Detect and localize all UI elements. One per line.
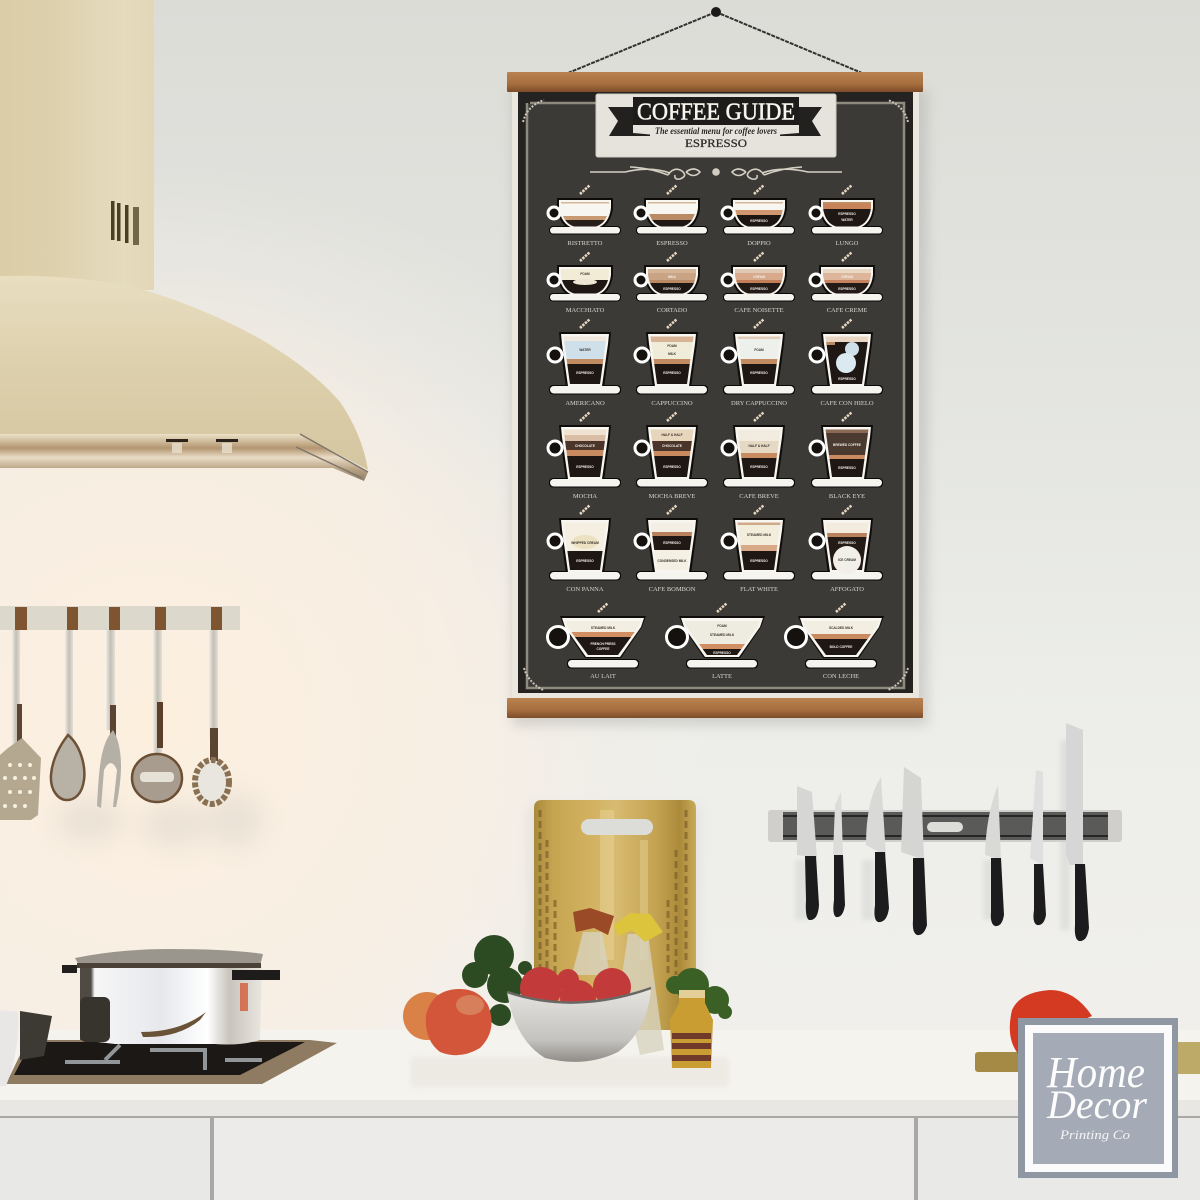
bar badge [927,822,963,832]
cup: americano [548,319,621,407]
cup: latte: STEAMED MILK [710,633,735,637]
cup: cortado: CORTADO [657,307,688,314]
round ladle [132,630,182,802]
cabinet door right [918,1118,1200,1200]
slotted spoon [195,630,229,804]
cup: cortado: MILK [668,275,677,279]
espresso heading: ESPRESSO [685,136,747,150]
cup: mocha breve: HALF & HALF [661,433,683,437]
subtitle: The essential menu for coffee lovers [655,126,777,136]
counter top surface [0,1030,1200,1102]
hood steel rim with lights [0,434,368,481]
cup: lungo: LUNGO [836,240,859,247]
cup: dry cappuccino: DRY CAPPUCCINO [731,400,787,407]
cup: black eye: BLACK EYE [829,493,865,500]
cup: ristretto: RISTRETTO [568,240,603,247]
hob [6,1040,337,1084]
magnetic bar [768,810,1122,842]
ribbon banner [633,97,799,125]
cup: lungo: WATER [841,218,853,222]
cup: con leche: CON LECHE [823,673,859,680]
cup: cappuccino: ESPRESSO [663,371,681,375]
cup: cafe bombon: ESPRESSO [663,541,681,545]
badge text decor: Decor [1046,1082,1147,1127]
cup: mocha: MOCHA [573,493,597,500]
knife 4 [901,767,927,935]
cup: con leche: SCALDED MILK [829,626,854,630]
cup: au lait: COFFEE [597,647,609,651]
cup: latte: FOAM [717,624,727,628]
cup: cafe breve: HALF & HALF [748,444,770,448]
cup: mocha: CHOCOLATE [575,444,595,448]
cup: cafe creme: CAFE CREME [827,307,867,314]
apple front [426,989,492,1055]
cup: cafe creme: ESPRESSO [838,287,856,291]
cup: lungo [810,185,883,247]
cup: con leche: BOLD COFFEE [830,645,852,649]
cup: flat white: STEAMED MILK [747,533,772,537]
cup: cafe noisette [722,252,795,314]
pot handle left [62,965,77,973]
cup: mocha [548,412,621,500]
cup: cafe con hielo: CAFE CON HIELO [820,400,874,407]
rack rail [0,606,240,630]
cup: con panna: WHIPPED CREAM [571,541,599,545]
poster shadow [512,90,928,726]
cabinet door left [0,1118,210,1200]
cup: flat white [722,505,795,593]
slotted spatula [0,630,41,820]
cup: lungo: ESPRESSO [838,212,856,216]
cup: cafe breve: CAFE BREVE [739,493,779,500]
utensil rack [0,606,263,848]
red pepper and platter [975,990,1200,1074]
counter reflection [410,1056,730,1088]
warm light under the hood [0,140,800,1100]
cup: cafe con hielo [810,319,883,407]
cup: black eye [810,412,883,500]
cup: flat white: FLAT WHITE [740,586,778,593]
wooden platter [975,1052,1025,1072]
cutting board [528,800,700,1046]
tomatoes [520,967,631,1016]
cup: black eye: BREWED COFFEE [833,443,861,447]
cup: americano: WATER [579,348,591,352]
cup: mocha breve: ESPRESSO [663,465,681,469]
knife rack [768,723,1122,941]
red pepper [1010,990,1092,1056]
cup: americano: AMERICANO [565,400,605,407]
fruit and herbs [403,908,732,1088]
hood vent slots [111,201,139,245]
cup: doppio: DOPPIO [747,240,771,247]
cup: au lait: FRENCH PRESS [591,642,615,646]
cup: ristretto [548,185,621,247]
cabinet door middle [214,1118,914,1200]
poster bottom wooden rail [507,698,923,718]
hanging cord and nail [568,7,862,73]
cup: latte [666,603,767,680]
cup: cafe con hielo: ESPRESSO [838,377,856,381]
kitchen counter [0,1030,1200,1200]
cup: affogato: AFFOGATO [830,586,864,593]
pot lid [75,949,263,967]
cup: cafe bombon: CONDENSED MILK [657,559,687,563]
cup: mocha: ESPRESSO [576,465,594,469]
cup: doppio [722,185,795,247]
pot handle right [232,970,280,980]
steel bowl [507,988,651,1062]
poster dark outer margin [518,92,913,693]
corner ornaments [523,100,908,690]
hob burners and grates [65,1045,262,1070]
cup: affogato: ICE CREAM [838,558,856,562]
flourish divider [590,167,842,179]
cup: cappuccino: CAPPUCCINO [651,400,693,407]
cup: affogato: ESPRESSO [838,541,856,545]
badge text home: Home [1046,1048,1145,1097]
badge outer plate [1018,1018,1178,1178]
cup: con panna: CON PANNA [566,586,604,593]
apple back [403,992,451,1040]
side bowl [20,1011,52,1060]
knife 1 [797,786,819,920]
cup: mocha breve [635,412,708,500]
cup: au lait: STEAMED MILK [591,626,616,630]
badge white frame [1029,1029,1168,1168]
badge text printing co: Printing Co [1059,1127,1131,1142]
cup: cafe breve [722,412,795,500]
cup: espresso: ESPRESSO [656,240,688,247]
title: COFFEE GUIDE [637,100,795,126]
cup: macchiato [548,252,621,314]
cup: au lait: AU LAIT [590,673,616,680]
poster dark background [528,104,904,687]
knife 6 [1030,770,1046,925]
poster inner border [527,103,904,688]
cup: doppio: ESPRESSO [750,219,768,223]
pot knob [80,997,110,1042]
knife shadows [795,740,1070,930]
knife 5 [985,785,1004,926]
cup: cafe noisette: CAFE NOISETTE [734,307,784,314]
cabinet base [0,1116,1200,1200]
cup: latte: LATTE [712,673,732,680]
cup: black eye: ESPRESSO [838,466,856,470]
range hood [0,0,368,481]
knife 3 [866,777,889,922]
cup: cafe breve: ESPRESSO [750,465,768,469]
cup: cappuccino: MILK [668,352,677,356]
cup: con panna [548,505,621,593]
board handle hole [581,819,653,835]
brand badge [1018,1018,1178,1178]
steel pot body [80,965,262,1044]
small oil bottle [670,990,713,1068]
cup: cafe noisette: ESPRESSO [750,287,768,291]
header card [596,94,836,157]
cup: latte: ESPRESSO [713,651,731,655]
cup: macchiato: FOAM [580,272,590,276]
serving fork [97,630,121,808]
cup: au lait [548,603,648,680]
cup: cafe bombon [635,505,708,593]
cup: espresso [635,185,708,247]
cup: con panna: ESPRESSO [576,559,594,563]
hood chimney duct [0,0,154,290]
herbs left [462,935,532,1026]
cup: dry cappuccino: ESPRESSO [750,371,768,375]
small ladle [51,630,84,800]
cup: affogato [810,505,883,593]
cup: americano: ESPRESSO [576,371,594,375]
ribbon tails [608,107,822,136]
herbs right [666,968,732,1019]
utensil shadows [56,792,263,848]
counter front edge [0,1100,1200,1116]
cup: cafe noisette: CREAM [753,275,765,279]
cup: mocha breve: CHOCOLATE [662,444,682,448]
cup: cappuccino: FOAM [667,344,677,348]
bottle red [572,908,614,975]
hood canopy [0,276,368,470]
poster top wooden rail [507,72,923,92]
cup: flat white: ESPRESSO [750,559,768,563]
cup: dry cappuccino [722,319,795,407]
cup: cafe creme: CREAM [841,275,853,279]
cup: cortado: ESPRESSO [663,287,681,291]
cup: cafe bombon: CAFE BOMBON [649,586,696,593]
knife 2 [833,792,845,917]
cup: con leche [786,603,886,680]
poster [512,88,919,700]
cup: cafe creme [810,252,883,314]
white jug at edge [0,1010,18,1086]
cup: mocha breve: MOCHA BREVE [649,493,695,500]
rack hooks [15,607,222,630]
cup: cortado [635,252,708,314]
pot reflection [240,983,248,1011]
cup: macchiato: MACCHIATO [566,307,605,314]
poster paper edge [512,88,919,700]
stove with pot [0,949,337,1086]
knife 7 [1066,723,1089,941]
bottle yellow [614,913,664,1055]
cup: cappuccino [635,319,708,407]
cup: dry cappuccino: FOAM [754,348,764,352]
